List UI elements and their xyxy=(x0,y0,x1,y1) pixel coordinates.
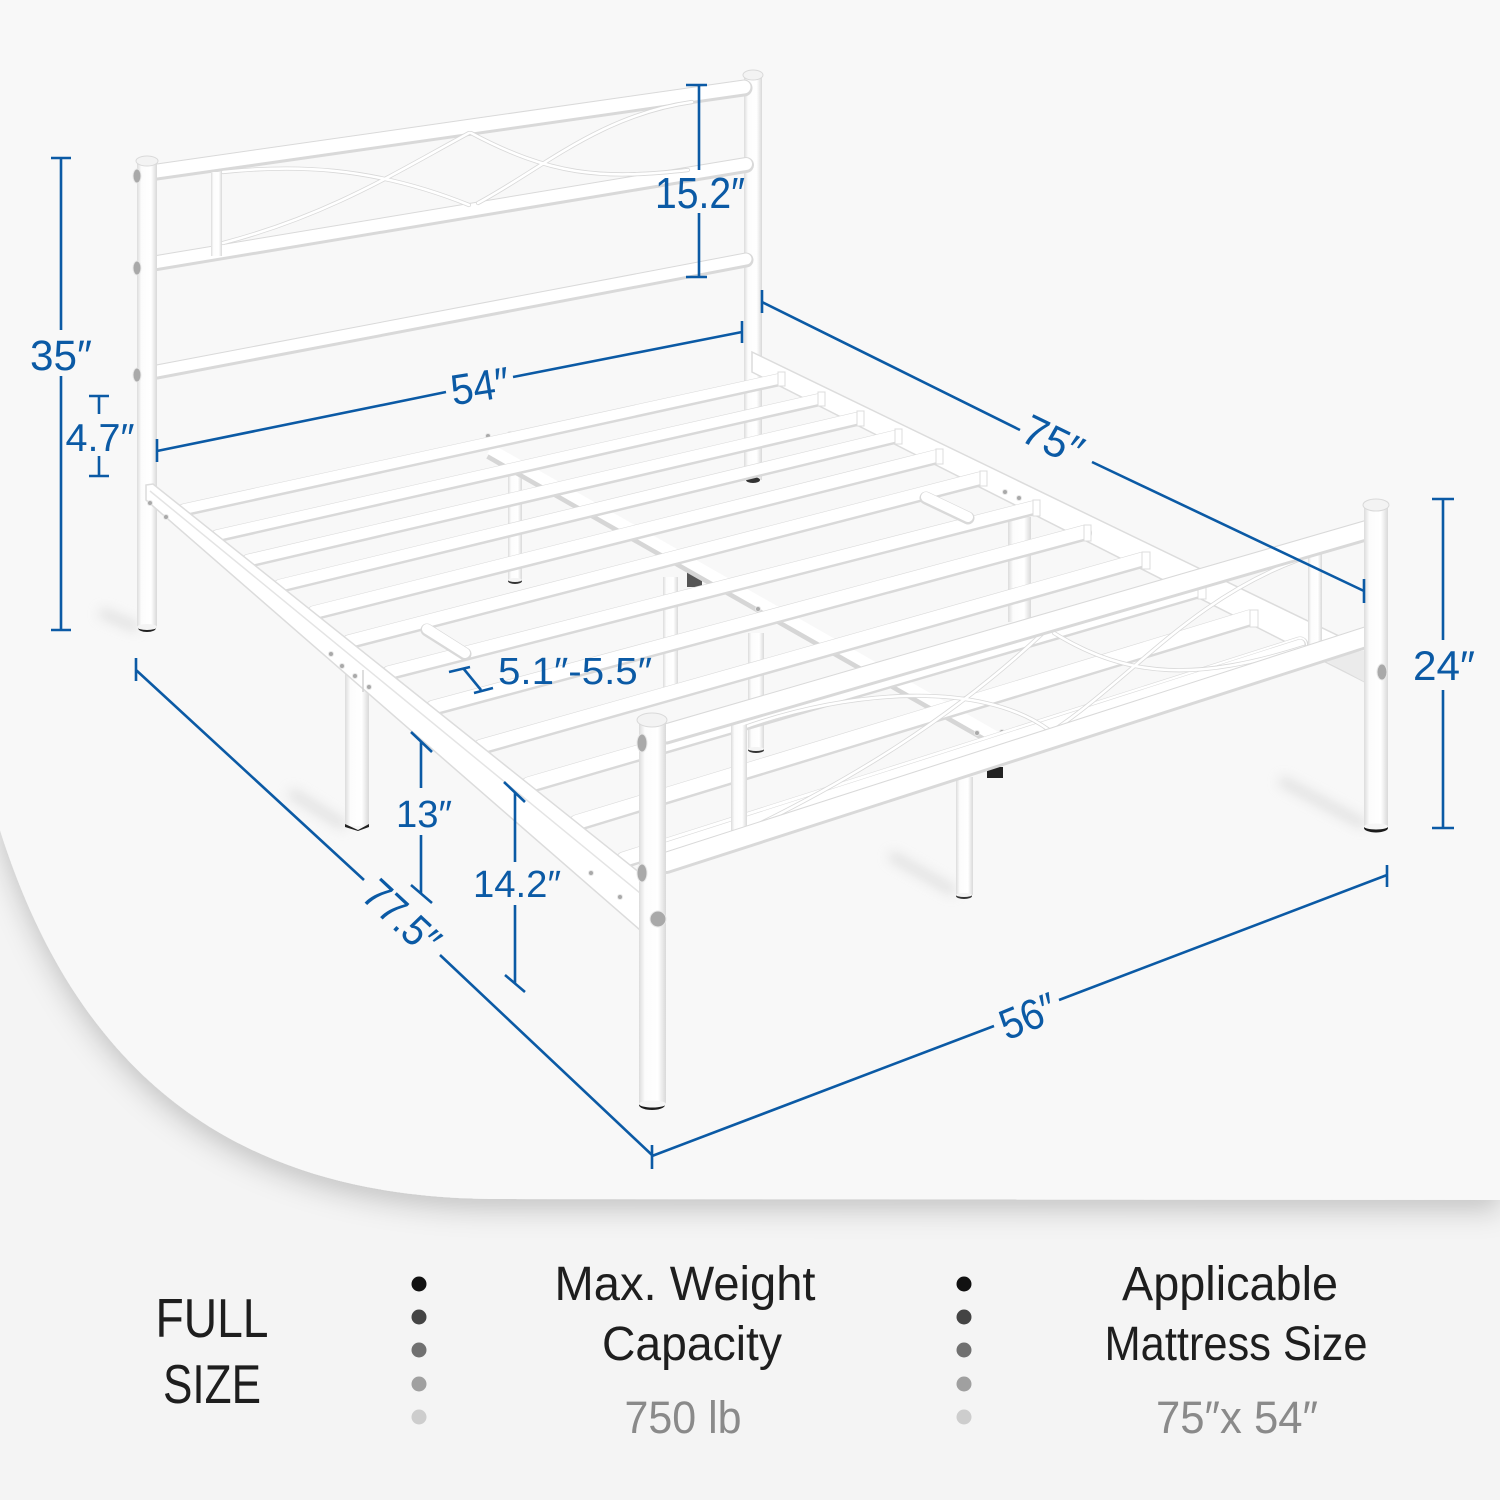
dimension: post offset 4.7 xyxy=(66,396,135,476)
footboard right post xyxy=(1363,499,1389,832)
dimension: inner width 54 xyxy=(157,321,742,462)
footboard lower inner rail xyxy=(666,644,1300,848)
footboard decorative curves xyxy=(745,560,1304,830)
fading dots left xyxy=(412,1276,426,1424)
dimension: clearance 13: 13″ xyxy=(396,794,452,836)
right side rail xyxy=(752,352,1372,682)
panel: curved product stage xyxy=(0,0,1500,1200)
fading dots right xyxy=(956,1276,972,1424)
heading: full size xyxy=(156,1287,268,1415)
spec: max weight capacity xyxy=(554,1258,816,1443)
dimension: overall length 77.5: 77.5″ xyxy=(353,870,450,965)
dimension: overall height 35: 35″ xyxy=(30,332,92,380)
headboard left post xyxy=(133,156,158,632)
dimension: headboard 15.2 xyxy=(655,85,745,277)
spec: max weight capacity: 750 lb xyxy=(624,1392,742,1443)
footboard left post xyxy=(637,713,667,1110)
dimension: headboard 15.2: 15.2″ xyxy=(655,169,745,218)
dimension: clearance 14.2 xyxy=(473,782,561,992)
spec: applicable mattress size: Mattress Size xyxy=(1104,1318,1368,1371)
floor shadows xyxy=(100,612,1365,892)
headboard rails xyxy=(157,87,746,372)
spec: applicable mattress size: Applicable xyxy=(1122,1258,1338,1311)
dimension: overall length 77.5 xyxy=(136,658,652,1155)
slat sockets on right rail xyxy=(778,372,1258,627)
headboard decorative curves xyxy=(223,102,692,243)
dimension: slat spacing: 5.1″-5.5″ xyxy=(498,651,652,693)
dimension: post offset 4.7: 4.7″ xyxy=(66,417,135,460)
dimension: inner length 75 xyxy=(762,290,1364,603)
heading: full size: FULL xyxy=(156,1287,268,1349)
dimension: clearance 14.2: 14.2″ xyxy=(473,864,561,906)
center support beam xyxy=(486,432,1005,745)
heading: full size: SIZE xyxy=(163,1353,261,1415)
dimension: overall width 56: 56″ xyxy=(992,984,1064,1050)
dimension: inner width 54: 54″ xyxy=(447,359,513,415)
footboard inner uprights xyxy=(731,552,1322,838)
headboard xyxy=(133,70,763,632)
left side rail xyxy=(146,484,640,930)
dimension: overall width 56 xyxy=(652,865,1387,1169)
spec: applicable mattress size: 75″x 54″ xyxy=(1156,1392,1318,1443)
dimension: overall height 35 xyxy=(30,158,92,630)
spec: applicable mattress size xyxy=(1104,1258,1368,1443)
spec: max weight capacity: Max. Weight xyxy=(554,1258,816,1311)
bed frame illustration xyxy=(133,70,1389,1110)
dimension: foot height 24: 24″ xyxy=(1413,642,1475,689)
mattress slats xyxy=(184,372,1300,860)
cross brace stubs xyxy=(427,497,968,654)
dimension: foot height 24 xyxy=(1413,499,1475,828)
headboard right post xyxy=(743,70,763,483)
dimension: inner length 75: 75″ xyxy=(1014,406,1091,476)
footboard xyxy=(637,499,1389,1110)
footboard rails xyxy=(666,528,1374,863)
spec: max weight capacity: Capacity xyxy=(602,1318,782,1371)
support legs xyxy=(345,470,1031,899)
headboard inner upright xyxy=(211,172,222,256)
dimension: clearance 13 xyxy=(396,732,452,903)
